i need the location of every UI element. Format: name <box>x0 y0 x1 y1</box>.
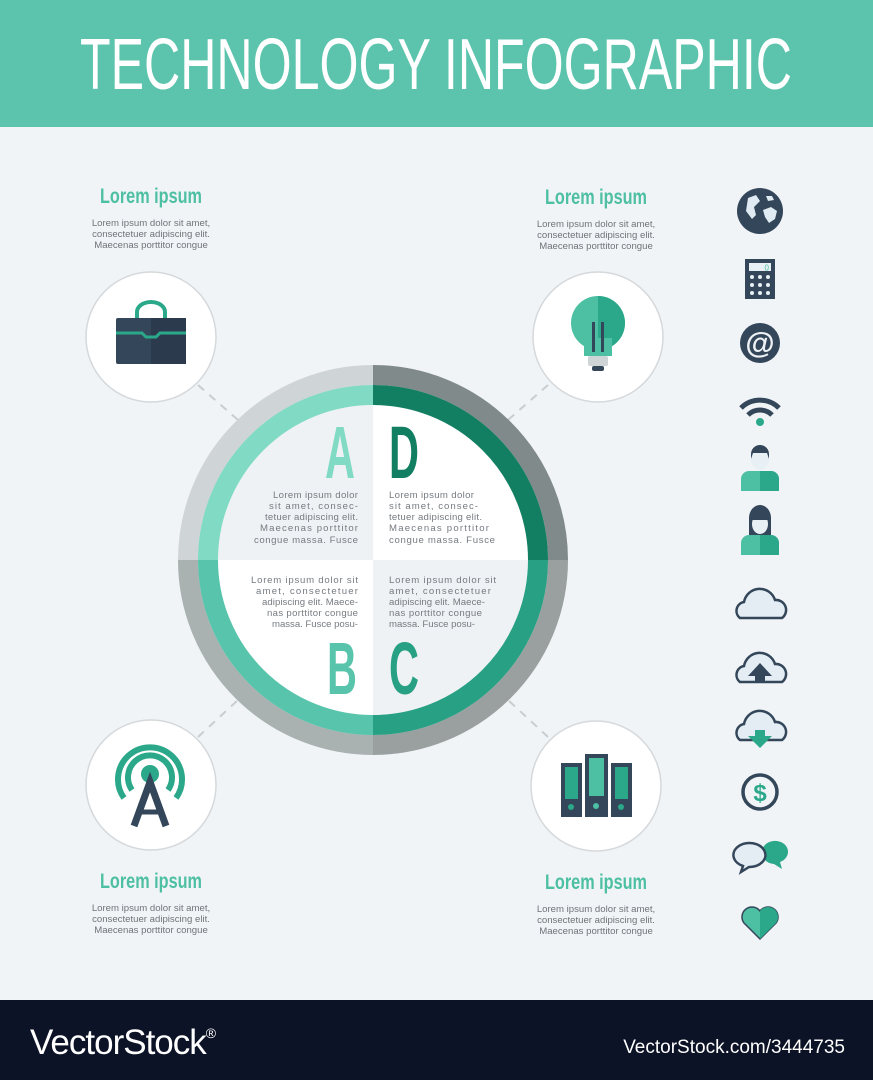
block top-right: Lorem ipsum dolor sit amet, <box>537 219 655 230</box>
icon: heart <box>742 907 778 939</box>
text D: Maecenas porttitor <box>389 523 490 534</box>
icon: cloud download <box>736 711 786 748</box>
block bottom-right: Lorem ipsum <box>545 871 647 894</box>
block bottom-left: Lorem ipsum dolor sit amet, <box>92 903 210 914</box>
icon: calculator <box>745 259 775 299</box>
text C: amet, consectetuer <box>389 586 492 597</box>
text D: sit amet, consec- <box>389 501 478 512</box>
icon: globe <box>737 188 783 234</box>
text D: congue massa. Fusce <box>389 535 495 546</box>
text A: tetuer adipiscing elit. <box>265 512 358 523</box>
letter D: D <box>389 411 419 494</box>
icon: cloud upload <box>736 653 786 683</box>
icon: briefcase <box>116 302 186 364</box>
footer: ® <box>206 1025 217 1041</box>
footer: VectorStock.com/3444735 <box>623 1037 845 1058</box>
text A: Maecenas porttitor <box>260 523 359 534</box>
icon: at sign: @ <box>745 327 775 360</box>
block bottom-right: Lorem ipsum dolor sit amet, <box>537 904 655 915</box>
text D <box>389 490 495 546</box>
block top-left: Maecenas porttitor congue <box>94 240 208 251</box>
letter A: A <box>325 411 355 494</box>
block top-left: consectetuer adipiscing elit. <box>92 229 210 240</box>
block top-left: Lorem ipsum dolor sit amet, <box>92 218 210 229</box>
icon: light bulb <box>571 296 625 371</box>
block bottom-left: Maecenas porttitor congue <box>94 925 208 936</box>
block bottom-left: consectetuer adipiscing elit. <box>92 914 210 925</box>
connectors <box>198 385 548 737</box>
text C: Lorem ipsum dolor sit <box>389 575 496 586</box>
icon: binders <box>561 754 632 817</box>
text B <box>251 575 359 630</box>
icon: calculator: 0 <box>765 264 770 272</box>
text C <box>389 575 496 630</box>
block top-left: Lorem ipsum <box>100 185 202 208</box>
header <box>0 0 873 127</box>
icon: wifi <box>741 400 779 426</box>
block top-left <box>86 185 216 402</box>
text A: congue massa. Fusce <box>254 535 358 546</box>
letter C: C <box>389 627 419 710</box>
block bottom-left: Lorem ipsum <box>100 870 202 893</box>
icon: at sign <box>740 323 780 363</box>
icon: chat <box>733 841 788 872</box>
icon: dollar <box>743 775 777 809</box>
footer: VectorStock <box>30 1023 206 1062</box>
text B: Lorem ipsum dolor sit <box>251 575 358 586</box>
block top-right: Lorem ipsum <box>545 186 647 209</box>
text B: adipiscing elit. Maece- <box>262 597 358 608</box>
text C: massa. Fusce posu- <box>389 619 475 630</box>
icon: man <box>741 445 779 491</box>
icon: cloud <box>736 589 786 618</box>
text A: Lorem ipsum dolor <box>273 490 359 501</box>
text D: tetuer adipiscing elit. <box>389 512 482 523</box>
text B: nas porttitor congue <box>267 608 358 619</box>
letter B: B <box>327 627 357 710</box>
text C: adipiscing elit. Maece- <box>389 597 485 608</box>
footer <box>0 1000 873 1080</box>
block bottom-right <box>531 721 661 937</box>
block bottom-left <box>86 720 216 936</box>
text D: Lorem ipsum dolor <box>389 490 475 501</box>
text B: amet, consectetuer <box>256 586 359 597</box>
icon: antenna <box>118 747 182 826</box>
icon column <box>733 188 788 939</box>
text C: nas porttitor congue <box>389 608 482 619</box>
block top-right: Maecenas porttitor congue <box>539 241 653 252</box>
text A: sit amet, consec- <box>269 501 358 512</box>
block bottom-right: Maecenas porttitor congue <box>539 926 653 937</box>
central circle <box>188 375 558 745</box>
block bottom-right: consectetuer adipiscing elit. <box>537 915 655 926</box>
text A <box>254 490 359 546</box>
block top-right <box>533 186 663 402</box>
text B: massa. Fusce posu- <box>272 619 358 630</box>
icon: woman <box>741 505 779 555</box>
block top-right: consectetuer adipiscing elit. <box>537 230 655 241</box>
icon: dollar: $ <box>753 780 767 807</box>
